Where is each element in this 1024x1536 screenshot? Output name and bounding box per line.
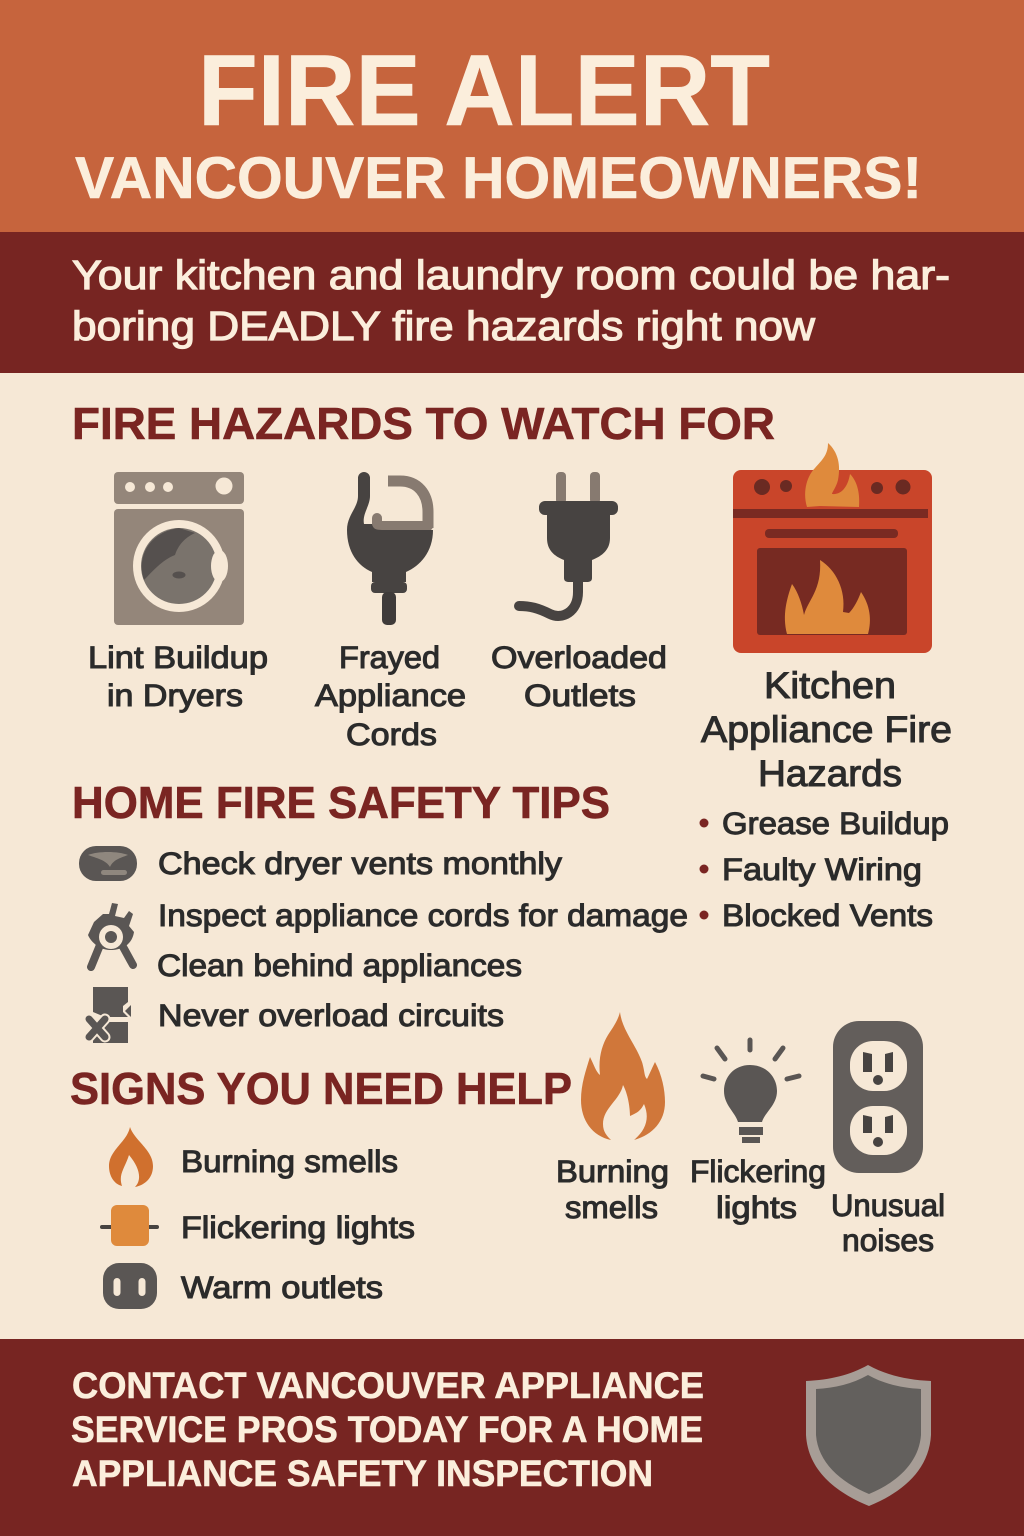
label: unusual noises: noises: [842, 1223, 934, 1258]
icon: large flame: [581, 1012, 665, 1140]
label: burning smells: smells: [565, 1190, 658, 1225]
footer call to action: APPLIANCE SAFETY INSPECTION: [72, 1453, 653, 1494]
text: flickering lights: Flickering lights: [181, 1210, 415, 1245]
footer call to action: [71, 1365, 704, 1494]
list: kitchen hazards: Grease Buildup: [722, 806, 949, 841]
heading: signs: SIGNS YOU NEED HELP: [70, 1063, 572, 1114]
icon: overloaded circuit: [89, 987, 131, 1043]
text: never overload: Never overload circuits: [158, 998, 504, 1033]
text: inspect cords: Inspect appliance cords for damage: [158, 898, 688, 933]
label: kitchen appliance fire hazards: Hazards: [758, 753, 902, 794]
label: flickering lights: [690, 1154, 826, 1225]
footer call to action: CONTACT VANCOUVER APPLIANCE: [72, 1365, 704, 1406]
icon: flickering light: [100, 1205, 159, 1246]
icon: plug: [519, 472, 618, 616]
icon: frayed cord: [347, 472, 433, 625]
list: kitchen hazards: Faulty Wiring: [722, 852, 922, 887]
subtitle: VANCOUVER HOMEOWNERS!: [75, 145, 922, 211]
heading: safety tips: HOME FIRE SAFETY TIPS: [72, 777, 610, 828]
text: warm outlets: Warm outlets: [181, 1270, 383, 1305]
text: check vents: Check dryer vents monthly: [158, 846, 563, 881]
text: clean behind: Clean behind appliances: [157, 948, 522, 983]
warning banner: boring DEADLY fire hazards right now: [72, 303, 815, 349]
list: kitchen hazards: [700, 806, 949, 933]
label: flickering lights: lights: [716, 1190, 797, 1225]
label: flickering lights: Flickering: [690, 1154, 826, 1189]
icon: light bulb: [703, 1040, 799, 1143]
icon: shield: [806, 1365, 931, 1506]
footer banner: [0, 1339, 1024, 1536]
label: unusual noises: [831, 1188, 945, 1258]
label: lint buildup: Lint Buildup: [88, 640, 268, 675]
label: frayed appliance cords: [315, 640, 466, 752]
text: burning smells: Burning smells: [181, 1144, 398, 1179]
warning banner: Your kitchen and laundry room could be har-: [72, 252, 950, 298]
icon: wall outlet: [833, 1021, 923, 1173]
label: overloaded outlets: Overloaded: [491, 640, 667, 675]
icon: damaged cord: [88, 903, 134, 967]
label: lint buildup: [88, 640, 268, 713]
label: kitchen appliance fire hazards: Kitchen: [764, 665, 896, 706]
label: unusual noises: Unusual: [831, 1188, 945, 1223]
icon: dryer: [114, 472, 244, 625]
heading: fire hazards: FIRE HAZARDS TO WATCH FOR: [72, 398, 775, 449]
label: overloaded outlets: Outlets: [524, 678, 636, 713]
label: frayed appliance cords: Appliance: [315, 678, 466, 713]
label: frayed appliance cords: Frayed: [339, 640, 440, 675]
label: burning smells: [556, 1154, 669, 1225]
icon: small flame: [109, 1127, 153, 1187]
label: kitchen appliance fire hazards: [701, 665, 952, 794]
icon: warm outlet: [103, 1263, 157, 1309]
warning banner: [0, 232, 1024, 373]
header banner: [0, 0, 1024, 232]
icon: oven on fire: [733, 443, 932, 653]
label: burning smells: Burning: [556, 1154, 669, 1189]
icon: vent: [79, 846, 137, 881]
footer call to action: SERVICE PROS TODAY FOR A HOME: [71, 1409, 703, 1450]
label: frayed appliance cords: Cords: [346, 717, 437, 752]
label: overloaded outlets: [491, 640, 667, 713]
list: kitchen hazards: Blocked Vents: [722, 898, 933, 933]
label: kitchen appliance fire hazards: Appliance Fire: [701, 709, 952, 750]
title: FIRE ALERT: [198, 35, 770, 147]
label: lint buildup: in Dryers: [107, 678, 243, 713]
